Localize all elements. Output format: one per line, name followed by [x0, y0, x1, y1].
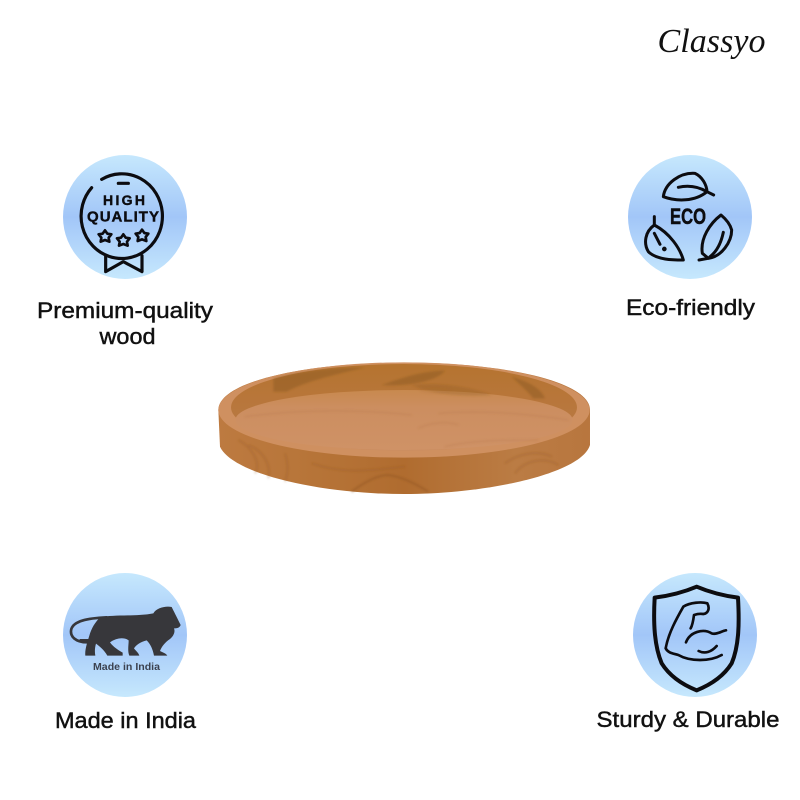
- side wood grain: [238, 440, 558, 492]
- eco text: ECO: [670, 204, 706, 229]
- inner wall: [231, 364, 577, 451]
- label: eco-friendly: Eco-friendly: [626, 295, 755, 320]
- inner floor: [235, 390, 573, 450]
- label: wood: wood: [98, 324, 156, 349]
- icon: high quality badge: [63, 155, 187, 279]
- wall dark patches: [273, 367, 545, 398]
- brand logo: Classyo: Classyo: [658, 23, 766, 60]
- label: made in india: Made in India: [55, 708, 197, 733]
- label: premium-quality: Premium-quality: [37, 298, 213, 323]
- feature: premium-quality wood: [37, 155, 213, 349]
- icon: lion: [63, 573, 187, 697]
- badge text: HIGH: [103, 192, 145, 208]
- feature: sturdy and durable: [596, 573, 780, 732]
- icon: high quality badge: QUALITY: [87, 208, 159, 226]
- tray rim: [218, 362, 590, 458]
- product photo: round wooden tray: [218, 362, 590, 494]
- feature: eco-friendly: [626, 155, 755, 320]
- feature: made in india: [55, 573, 197, 733]
- floor wood grain: [245, 386, 568, 447]
- tray side: [218, 363, 590, 494]
- icon: eco leaves: [628, 155, 752, 279]
- label: sturdy and durable: Sturdy & Durable: [596, 707, 780, 732]
- made in india text: Made in India: [93, 662, 160, 673]
- icon: shield with arm: [633, 573, 757, 697]
